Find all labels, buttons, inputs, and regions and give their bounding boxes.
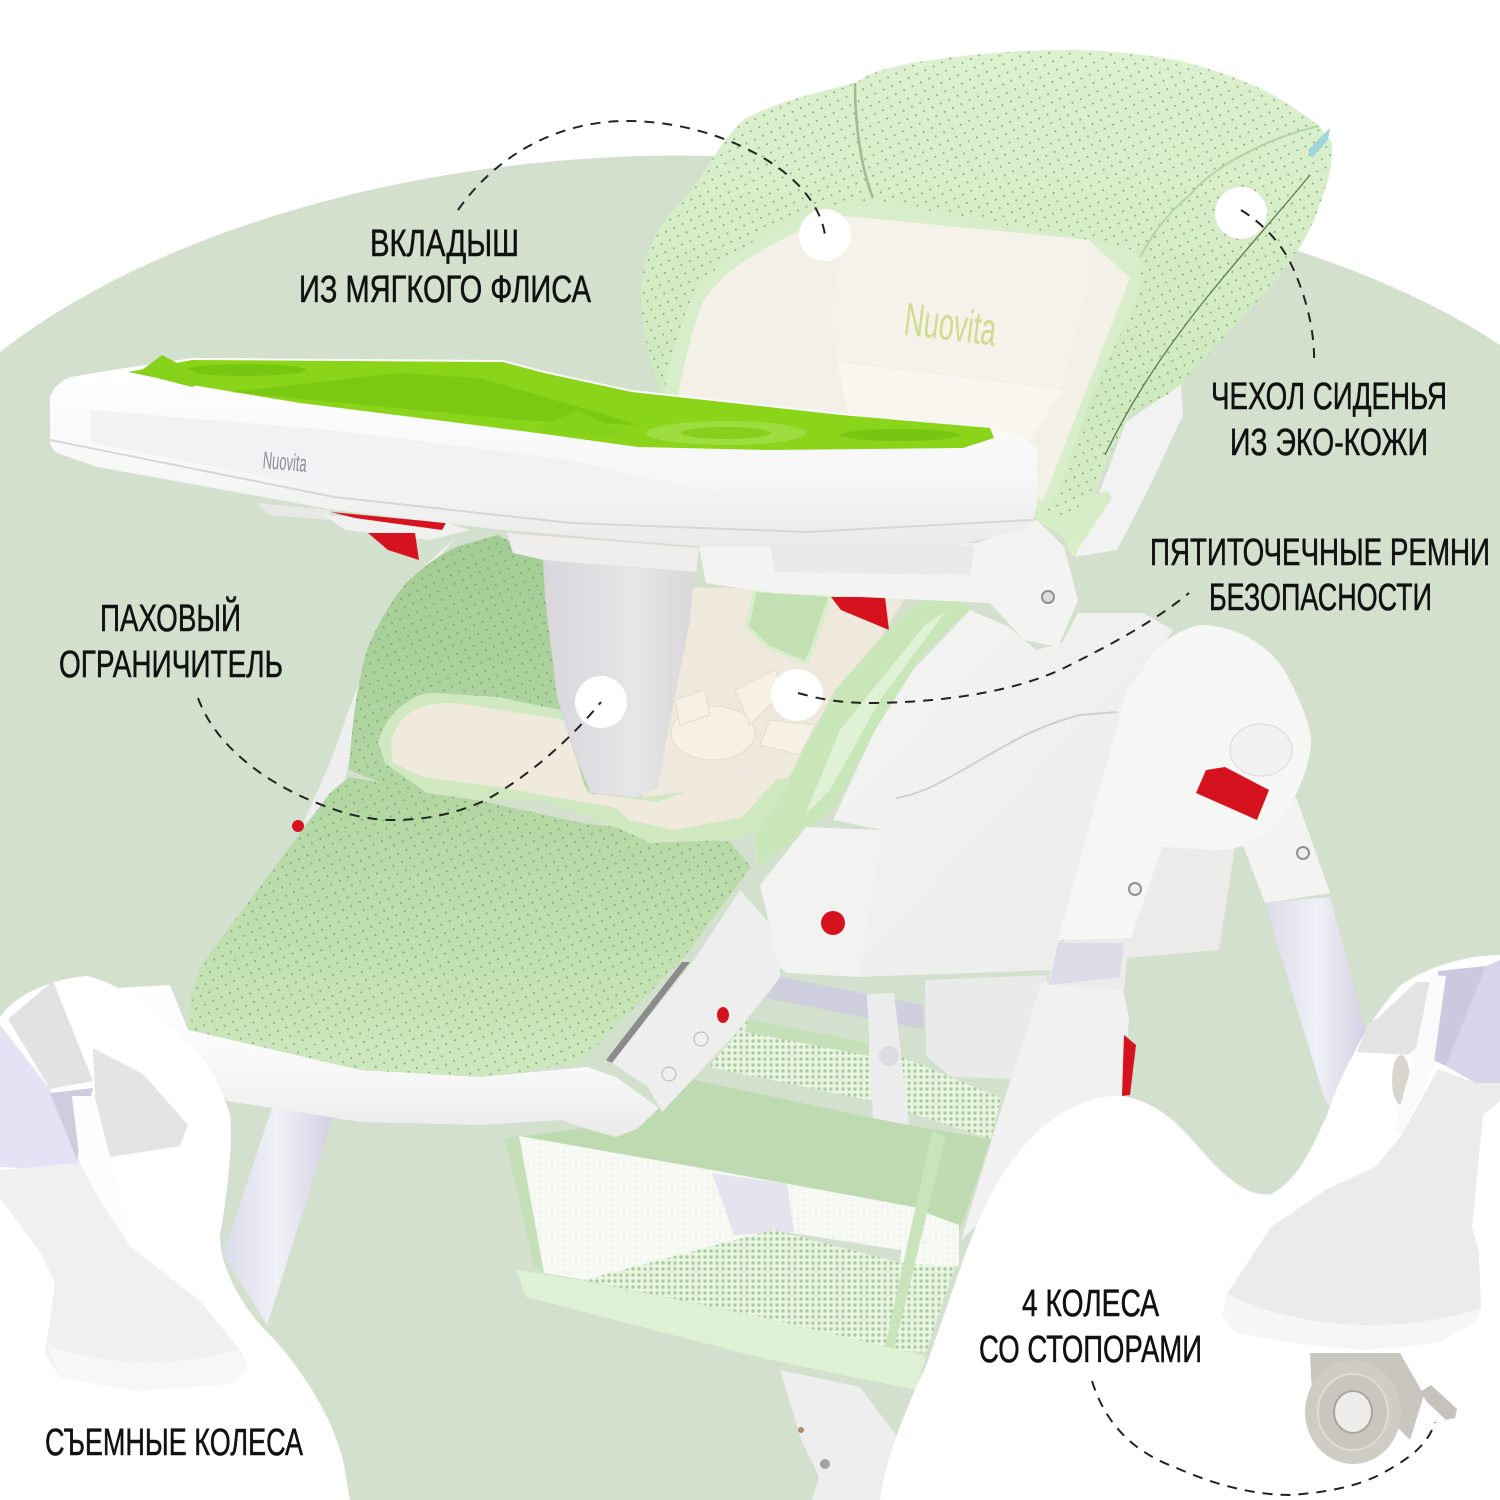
tray xyxy=(50,355,1037,548)
tray hinge and clamps xyxy=(256,503,1078,647)
footrest hinge arm xyxy=(606,827,882,1112)
shoulder pad and red buckle part xyxy=(747,590,889,663)
main frame body xyxy=(833,610,1330,1240)
chair legs xyxy=(223,897,1368,1500)
label: eco leather cover: ИЗ ЭКО-КОЖИ xyxy=(1230,422,1428,464)
tray logo: Nuovita xyxy=(262,447,308,478)
green tray inset xyxy=(128,360,994,450)
removable wheel detail xyxy=(0,981,248,1391)
lower seat cover xyxy=(349,535,970,867)
harness buckle xyxy=(671,670,815,760)
label: four wheels with brakes: СО СТОПОРАМИ xyxy=(979,1329,1202,1371)
label: fleece insert: ИЗ МЯГКОГО ФЛИСА xyxy=(299,269,591,311)
dashed leader lines xyxy=(198,121,1435,1495)
white blob: right bottom xyxy=(880,955,1500,1500)
logo on the insert: Nuovita xyxy=(902,293,1000,356)
fleece back insert xyxy=(664,200,1142,512)
label: eco leather cover xyxy=(1211,376,1447,464)
left frame sliver and red catch xyxy=(292,537,456,832)
backrest seat cover xyxy=(641,50,1332,557)
label: removable wheels: СЪЕМНЫЕ КОЛЕСА xyxy=(45,1422,303,1464)
label: fleece insert xyxy=(299,223,591,311)
footrest cover xyxy=(188,777,751,1077)
footrest tray xyxy=(117,985,659,1137)
label: four wheels with brakes: 4 КОЛЕСА xyxy=(1022,1283,1159,1325)
label: five-point belts xyxy=(1150,532,1490,619)
callout markers: white dots xyxy=(575,187,1267,728)
side handle xyxy=(1058,625,1311,940)
fleece seat insert xyxy=(378,693,793,843)
rear frame behind the backrest xyxy=(1075,384,1183,557)
caster wheel xyxy=(1305,1353,1457,1464)
white blob: left bottom xyxy=(0,976,350,1500)
label: crotch restraint xyxy=(59,595,283,686)
label: four wheels with brakes xyxy=(979,1283,1202,1371)
side trim xyxy=(755,593,970,867)
fixed wheel detail xyxy=(1222,960,1500,1464)
label: fleece insert: ВКЛАДЫШ xyxy=(370,223,519,265)
label: crotch restraint: ОГРАНИЧИТЕЛЬ xyxy=(59,644,283,686)
tray support post xyxy=(543,560,694,797)
storage basket xyxy=(505,977,1001,1390)
red recline lever xyxy=(1196,767,1269,820)
label: crotch restraint: ПАХОВЫЙ xyxy=(100,595,241,640)
